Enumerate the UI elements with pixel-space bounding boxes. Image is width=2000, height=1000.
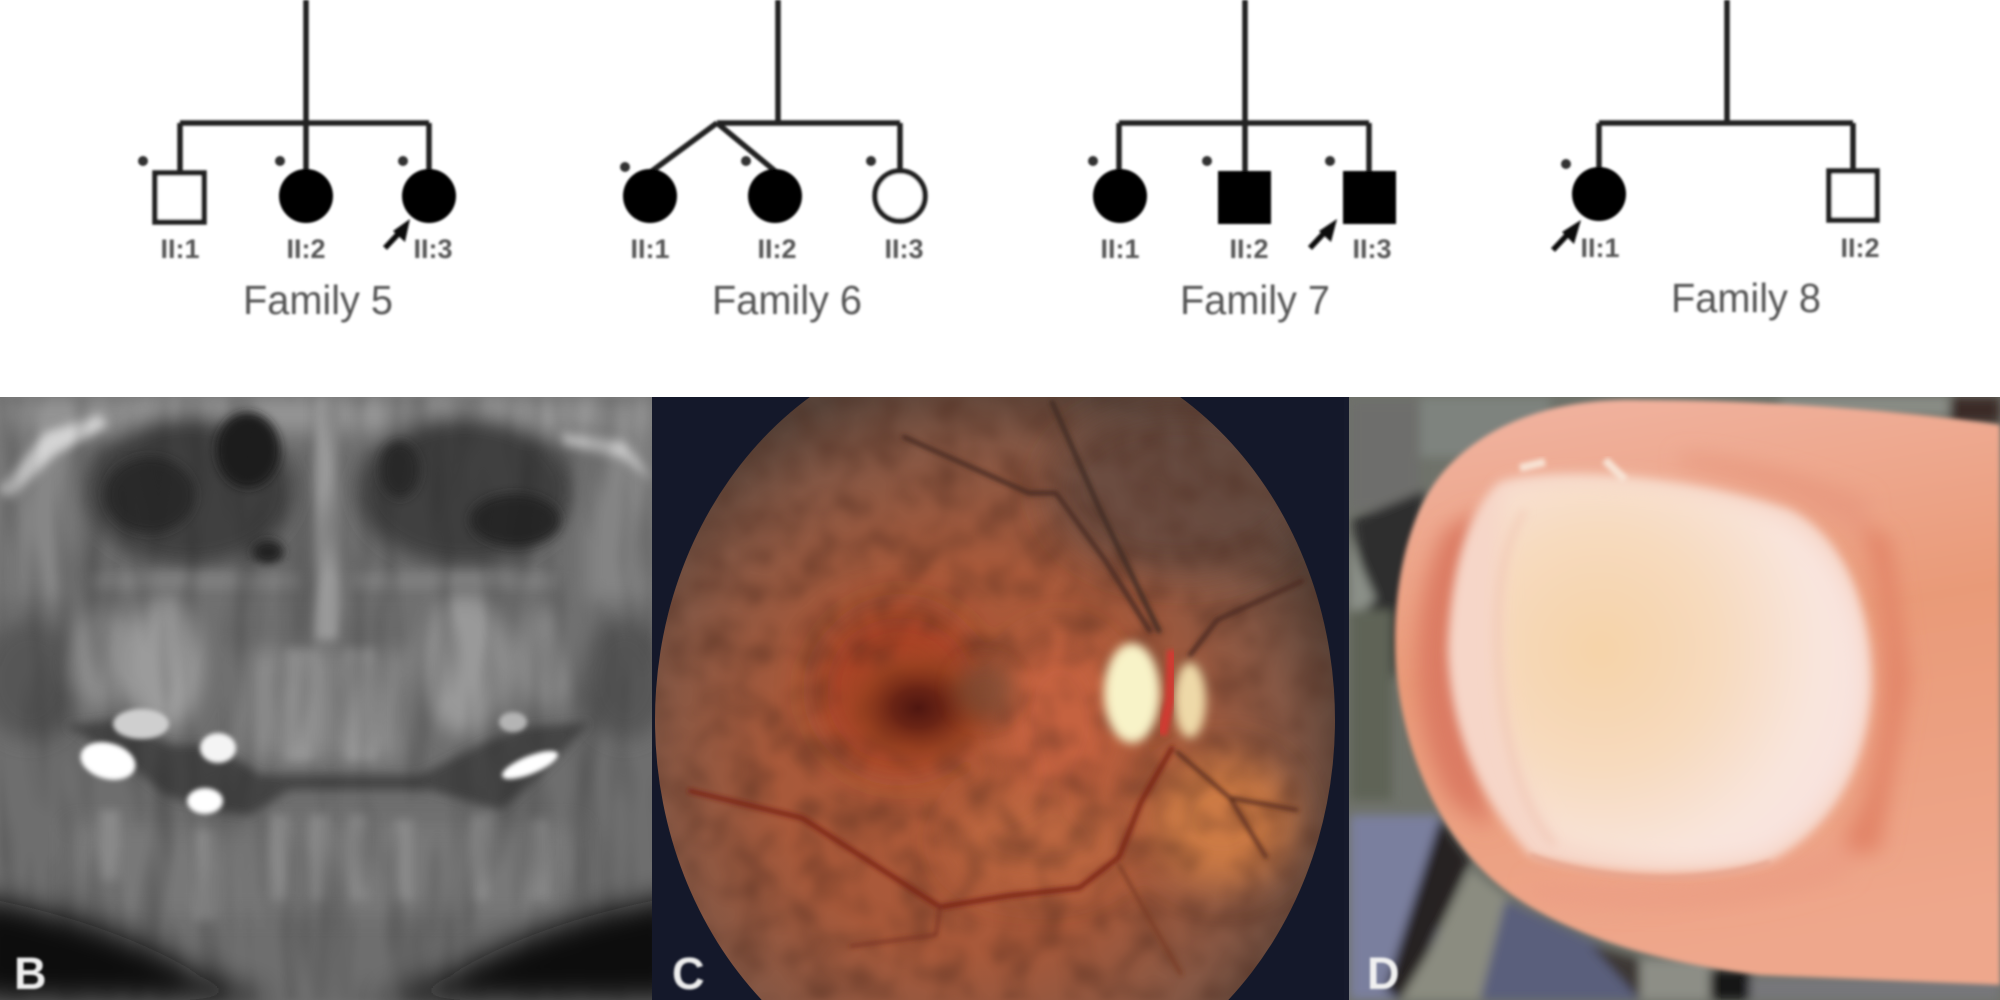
panel label D: D (1367, 948, 1400, 999)
family 5 pedigree (138, 0, 456, 323)
optic disc (1104, 643, 1206, 743)
panel label B: B (14, 948, 46, 999)
family 6 pedigree: Family 6 (712, 277, 862, 323)
family 8 pedigree: II:2 (1840, 233, 1880, 263)
family 6 pedigree: II:3 (884, 234, 924, 264)
panel label C: C (672, 948, 704, 999)
family 7 pedigree: II:2 (1229, 234, 1269, 264)
blood vessels (690, 402, 1302, 974)
family 5 pedigree: Family 5 (243, 277, 393, 323)
panel A: pedigrees (138, 0, 1880, 323)
family 7 pedigree: II:3 (1352, 234, 1392, 264)
family 7 pedigree (1088, 0, 1396, 323)
family 6 pedigree: II:1 (630, 234, 670, 264)
panel C: retinal fundus photograph (652, 397, 1344, 1000)
family 5 pedigree: II:3 (413, 234, 453, 264)
family 8 pedigree: II:1 (1580, 233, 1620, 263)
family 5 pedigree: II:1 (160, 234, 200, 264)
panel B: panoramic dental x-ray (0, 397, 682, 1000)
family 8 pedigree: Family 8 (1671, 275, 1821, 321)
family 6 pedigree: II:2 (757, 234, 797, 264)
family 6 pedigree (620, 0, 925, 323)
family 7 pedigree: Family 7 (1180, 277, 1330, 323)
nail plate (1448, 460, 1870, 877)
family 8 pedigree (1553, 0, 1880, 321)
panel D: fingernail photograph (1344, 397, 2000, 1000)
family 7 pedigree: II:1 (1100, 234, 1140, 264)
family 5 pedigree: II:2 (286, 234, 326, 264)
